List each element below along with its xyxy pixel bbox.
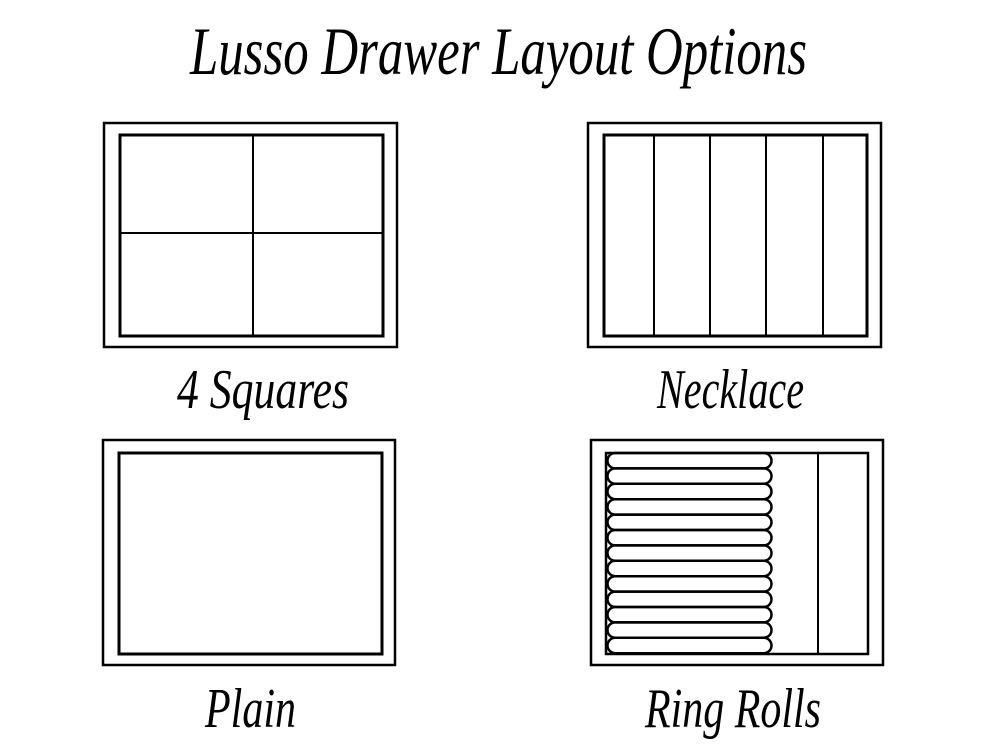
label: 4 Squares: 4 Squares	[177, 359, 349, 421]
label: Necklace: Necklace	[656, 359, 804, 421]
panel: necklace layout	[588, 123, 881, 347]
panel: 4 squares layout	[104, 123, 397, 347]
title: Lusso Drawer Layout Options	[189, 13, 807, 89]
panel: plain layout	[103, 440, 395, 665]
label: Ring Rolls: Ring Rolls	[644, 678, 821, 740]
ring rolls	[608, 453, 772, 653]
label: Plain: Plain	[204, 678, 296, 740]
panel: ring rolls layout	[591, 440, 883, 665]
